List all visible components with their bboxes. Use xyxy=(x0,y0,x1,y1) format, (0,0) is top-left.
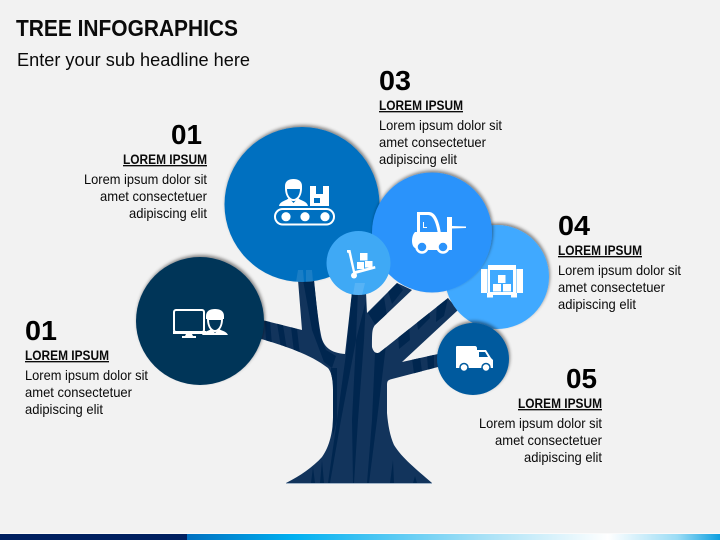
text block: 04: amet consectetuer xyxy=(558,279,665,295)
icon: monitor and worker xyxy=(173,309,228,338)
text block: lower 01: LOREM IPSUM xyxy=(25,348,109,363)
circle 1: dark navy with monitor and worker xyxy=(136,257,264,385)
text block: 05: adipiscing elit xyxy=(524,449,602,465)
text block: 03: adipiscing elit xyxy=(379,151,457,167)
icon: hand truck xyxy=(347,250,376,278)
text block: 05: LOREM IPSUM xyxy=(518,396,602,411)
text block: upper 01 xyxy=(84,119,207,221)
text block: upper 01: LOREM IPSUM xyxy=(123,152,207,167)
text block: lower 01: Lorem ipsum dolor sit xyxy=(25,367,148,383)
subtitle: Enter your sub headline here xyxy=(17,49,250,70)
text block: 04: Lorem ipsum dolor sit xyxy=(558,262,681,278)
circle 3: bright blue with forklift xyxy=(372,172,492,292)
text block: 05: 05 xyxy=(566,363,597,394)
footer bar xyxy=(0,533,720,540)
icon: delivery van xyxy=(456,346,493,372)
text block: upper 01: adipiscing elit xyxy=(129,205,207,221)
text block: 04: adipiscing elit xyxy=(558,296,636,312)
text block: lower 01: adipiscing elit xyxy=(25,401,103,417)
text block: upper 01: Lorem ipsum dolor sit xyxy=(84,171,207,187)
text block: 05: amet consectetuer xyxy=(495,432,602,448)
text block: upper 01: 01 xyxy=(171,119,202,150)
text block: lower 01: 01 xyxy=(25,315,57,346)
circle: small light blue with hand truck xyxy=(326,231,390,295)
text block: 04 xyxy=(558,210,681,312)
text block: 04: 04 xyxy=(558,210,590,241)
circle 5: deep blue with delivery van xyxy=(437,323,509,395)
text block: 03: amet consectetuer xyxy=(379,134,486,150)
circle 2: mid blue with conveyor worker xyxy=(224,127,380,282)
text block: 03: LOREM IPSUM xyxy=(379,98,463,113)
icon: forklift xyxy=(412,212,466,252)
text block: 03 xyxy=(379,65,502,167)
icon: container with boxes xyxy=(481,265,523,298)
text block: 03: 03 xyxy=(379,65,411,96)
text block: upper 01: amet consectetuer xyxy=(100,188,207,204)
title: TREE INFOGRAPHICS xyxy=(16,15,238,41)
text block: 05: Lorem ipsum dolor sit xyxy=(479,415,602,431)
text block: 03: Lorem ipsum dolor sit xyxy=(379,117,502,133)
text block: 05 xyxy=(479,363,602,465)
icon: conveyor with worker and box xyxy=(275,179,334,224)
faint branch overlay xyxy=(296,270,313,282)
circle 4: light blue with container xyxy=(445,225,549,329)
text block: lower 01 xyxy=(25,315,148,417)
faint branch overlay xyxy=(353,283,365,295)
tree trunk and branches xyxy=(261,281,458,484)
text block: lower 01: amet consectetuer xyxy=(25,384,132,400)
text block: 04: LOREM IPSUM xyxy=(558,243,642,258)
